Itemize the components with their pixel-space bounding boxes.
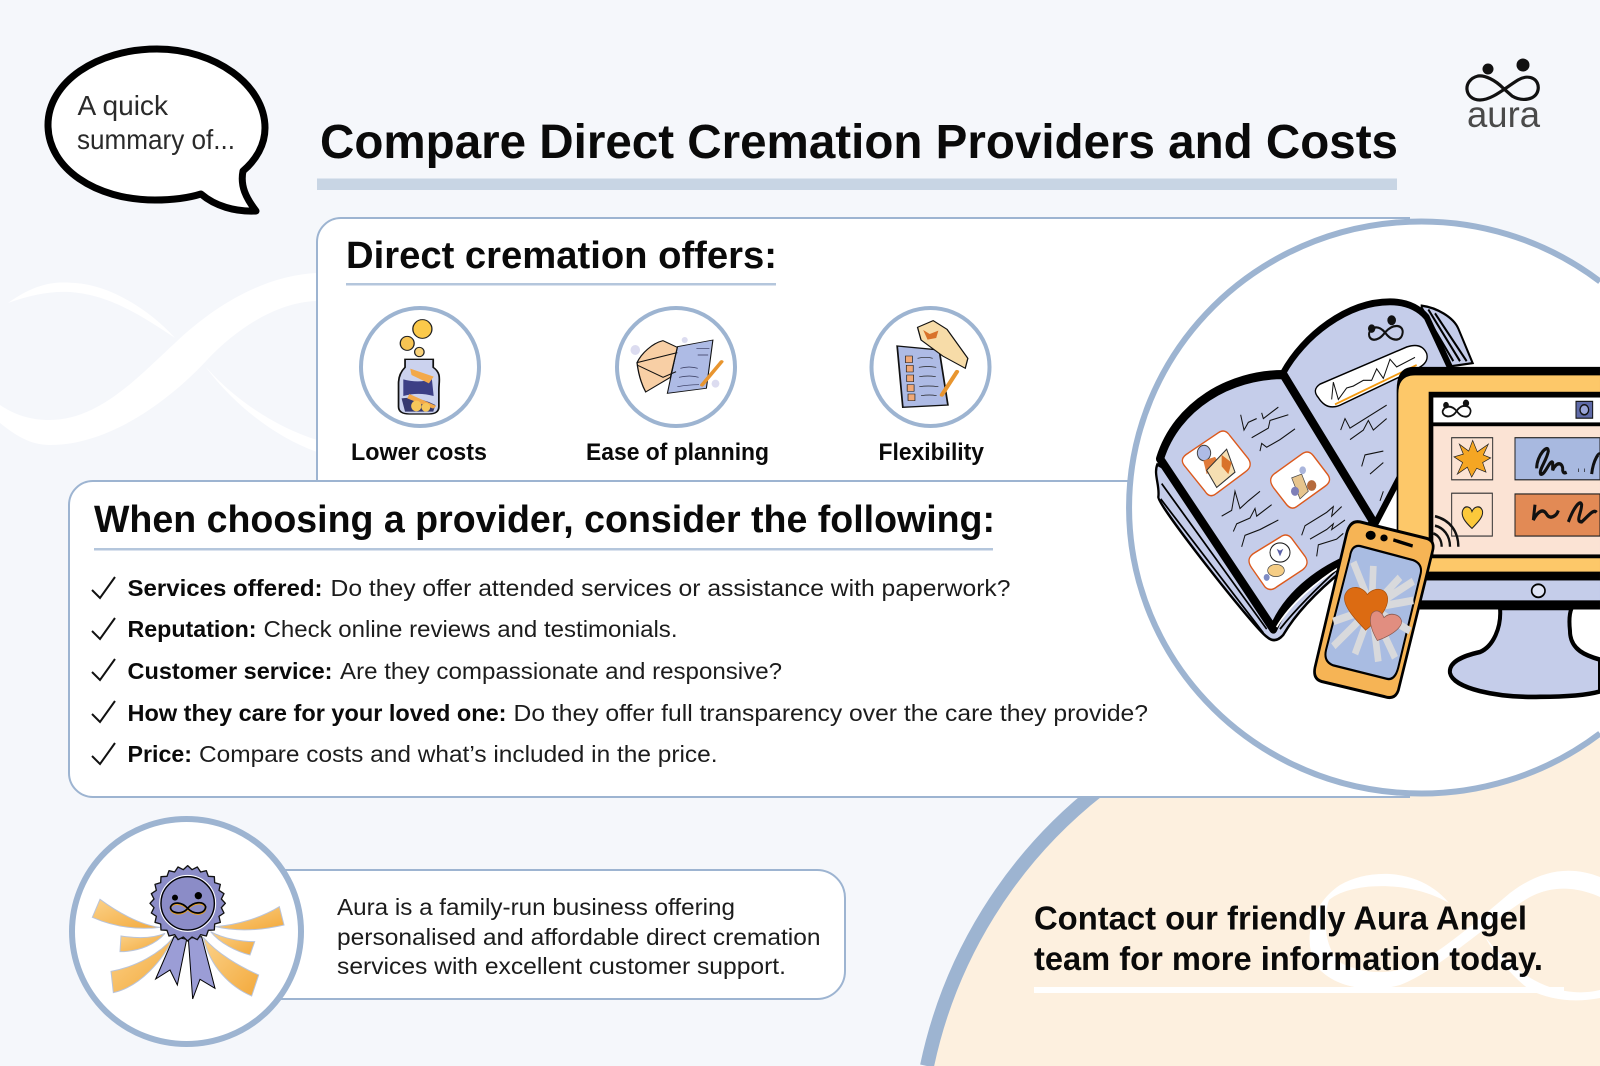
item: how they care [92, 700, 1148, 726]
orange script tile [1515, 494, 1600, 536]
logo: aura: aura [1467, 94, 1540, 135]
item: reputation: Check online reviews and testimonials. [264, 616, 678, 642]
ribbon tails [156, 937, 215, 999]
medal [150, 866, 225, 941]
icon: award rosette [72, 819, 301, 1044]
about text: personalised and affordable direct cremation [337, 924, 820, 950]
signal arcs [1433, 516, 1458, 547]
panel: direct cremation offers [317, 218, 1410, 481]
item: price: Price: [128, 741, 192, 767]
illustration: open book [1156, 302, 1473, 640]
speech bubble: a quick summary: A quick [78, 90, 169, 121]
ribbons gold [92, 899, 284, 996]
about text: Aura is a family-run business offering [337, 894, 735, 920]
item: customer service [92, 658, 782, 684]
item: customer service: Customer service: [128, 658, 332, 684]
item: price: Compare costs and what’s included in the price. [199, 741, 718, 767]
illustration: mobile phone [1315, 522, 1433, 698]
thumbnail: coffin with flowers [1271, 452, 1330, 508]
illustration circle: book, monitor and phone [1129, 222, 1600, 794]
call to action: contact: Contact our friendly Aura Angel [1034, 900, 1527, 936]
scribbles on page [1222, 405, 1387, 556]
item: customer service: Are they compassionate and responsive? [340, 658, 782, 684]
heading: direct cremation offers: Direct cremation offers: [346, 235, 777, 277]
heart card [1452, 493, 1492, 536]
label: ease of planning: Ease of planning [586, 439, 769, 466]
book logo [1369, 316, 1403, 340]
call to action: contact [1034, 900, 1564, 993]
panel: about aura [270, 870, 845, 999]
background infinity watermark [0, 273, 317, 452]
title: Compare Direct Cremation Providers and Costs [320, 116, 1398, 169]
monitor header logo [1443, 401, 1471, 417]
about text [337, 894, 820, 979]
item: reputation: Reputation: [128, 616, 256, 642]
about text: services with excellent customer support. [337, 953, 786, 979]
panel: when choosing a provider [69, 481, 1410, 797]
thumbnail: speech bubbles [1249, 535, 1307, 589]
title label on page [1315, 346, 1427, 407]
item: how they care: How they care for your loved one: [128, 700, 506, 726]
heading: when choosing a provider: When choosing a provider, consider the following: [94, 499, 995, 541]
item: services offered: Do they offer attended services or assistance with paperwork? [330, 575, 1010, 601]
star card [1452, 438, 1493, 480]
thumbnail: person at desk [1182, 431, 1250, 496]
contact infinity watermark [1310, 871, 1600, 1000]
label: flexibility: Flexibility [878, 439, 985, 466]
speech bubble: a quick summary [48, 49, 265, 211]
logo: aura [1467, 58, 1540, 135]
label: lower costs: Lower costs [351, 439, 487, 466]
monitor button [1576, 401, 1593, 418]
icon: jar of coins [361, 308, 479, 426]
item: reputation [92, 616, 678, 642]
checklist [92, 575, 1148, 767]
call to action: contact: team for more information today. [1034, 940, 1543, 977]
item: how they care: Do they offer full transparency over the care they provide? [514, 700, 1148, 726]
illustration: desktop monitor [1397, 367, 1600, 697]
speech bubble: a quick summary: summary of... [77, 124, 235, 155]
blue script tile [1515, 438, 1600, 480]
icon: envelope and letter [617, 308, 735, 426]
peach contact panel [925, 690, 1600, 1066]
item: services offered: Services offered: [128, 575, 322, 601]
icon: coffin and list [872, 308, 990, 426]
